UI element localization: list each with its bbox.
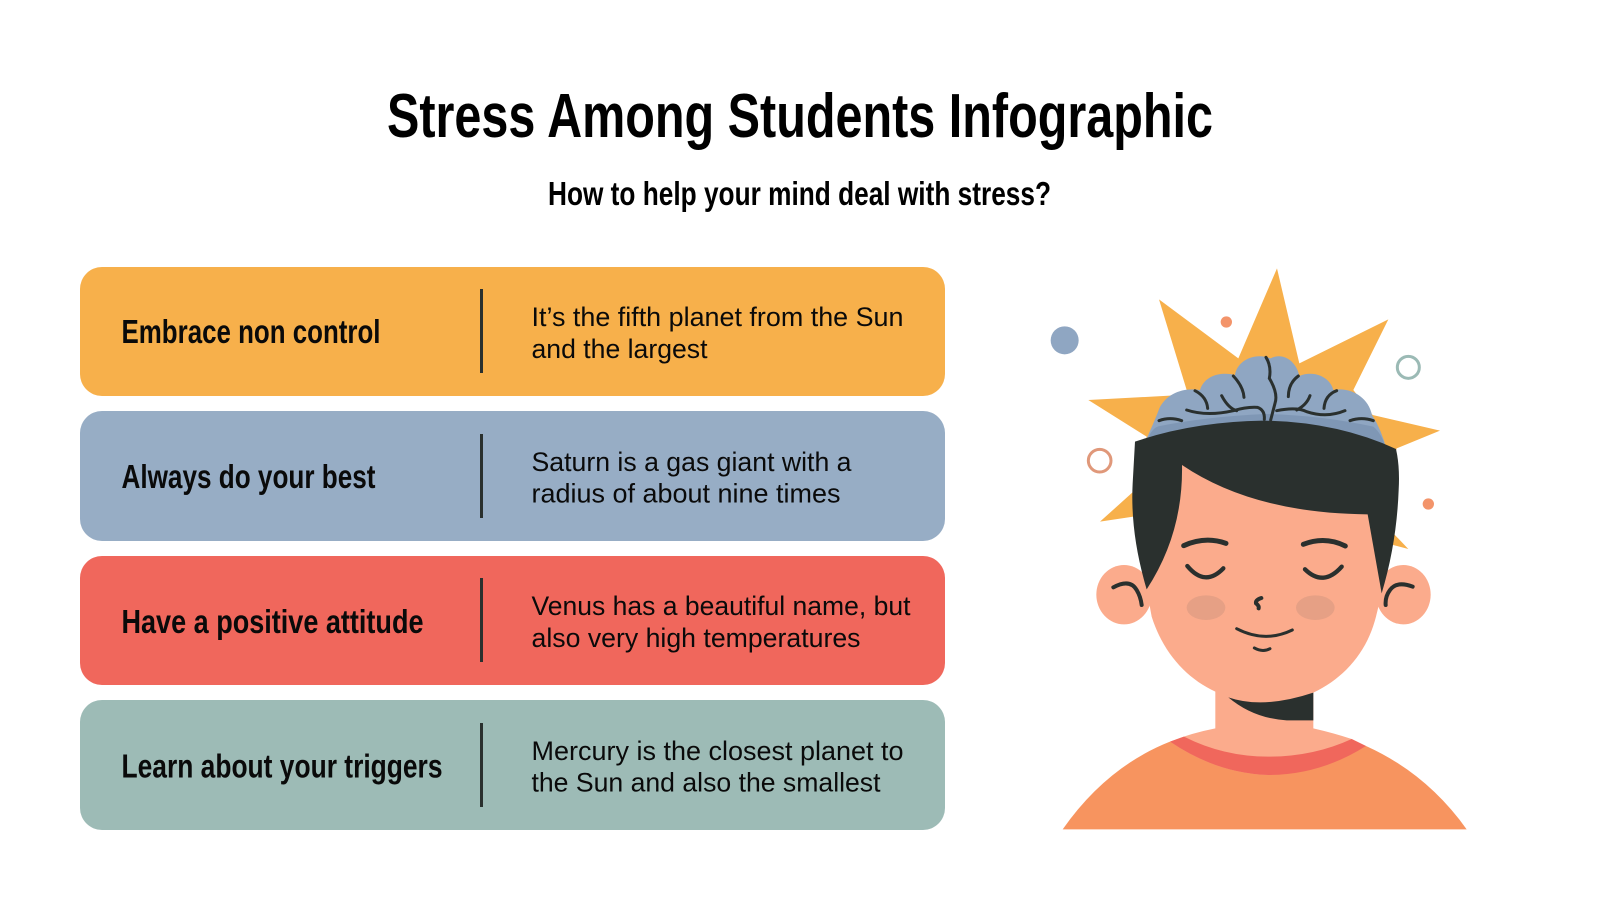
face: cheeks (1187, 595, 1335, 620)
body: face (1147, 463, 1382, 704)
text block: positive description: Venus has a beautiful name, but (532, 591, 911, 621)
icon: small orange dot top (1221, 316, 1232, 328)
body: left ear (1096, 565, 1152, 624)
heading: always do your best: Always do your best (122, 458, 376, 495)
heading: embrace non control: Embrace non control (122, 313, 380, 350)
heading: learn about your triggers: Learn about your triggers (122, 748, 442, 784)
subtitle: How to help your mind deal with stress? (548, 175, 1051, 212)
text block: always description (532, 447, 852, 508)
face: nose (1256, 598, 1261, 608)
panel: learn about your triggers (80, 700, 945, 830)
icon: brain (1147, 356, 1387, 450)
text block: embrace description: and the largest (532, 334, 708, 364)
body: neck and chest (1170, 683, 1366, 775)
face: mouth (1237, 629, 1292, 651)
face: closed eyes (1187, 566, 1342, 578)
panel: embrace non control (80, 267, 945, 396)
body: shirt (1063, 742, 1467, 829)
panel: always do your best (80, 411, 945, 541)
heading: have a positive attitude: Have a positive attitude (122, 603, 424, 640)
face: ear lines (1113, 583, 1413, 605)
icon: stress burst (1088, 268, 1440, 549)
body: hair (1132, 421, 1399, 593)
body: right ear (1376, 565, 1431, 624)
body: neck shadow (1228, 693, 1313, 720)
icon: blue dot (1051, 326, 1079, 354)
title: Stress Among Students Infographic (387, 82, 1213, 151)
text block: embrace description: It’s the fifth planet from the Sun (532, 302, 904, 332)
face: eyebrows (1184, 540, 1345, 546)
body: shirt collar (1170, 737, 1366, 775)
illustration: student with brain and stress burst (1051, 268, 1467, 829)
icon: orange ring (1088, 449, 1111, 472)
text block: triggers description: the Sun and also the smallest (532, 768, 881, 798)
text block: always description: radius of about nine times (532, 478, 840, 508)
icon: teal ring (1397, 356, 1419, 378)
text block: embrace description (532, 302, 904, 364)
text block: triggers description (532, 736, 904, 798)
panel: have a positive attitude (80, 556, 945, 685)
text block: triggers description: Mercury is the closest planet to (532, 736, 904, 766)
text block: positive description (532, 591, 911, 653)
text block: always description: Saturn is a gas giant with a (532, 447, 852, 477)
icon: small orange dot right (1423, 498, 1434, 510)
text block: positive description: also very high temperatures (532, 623, 860, 653)
